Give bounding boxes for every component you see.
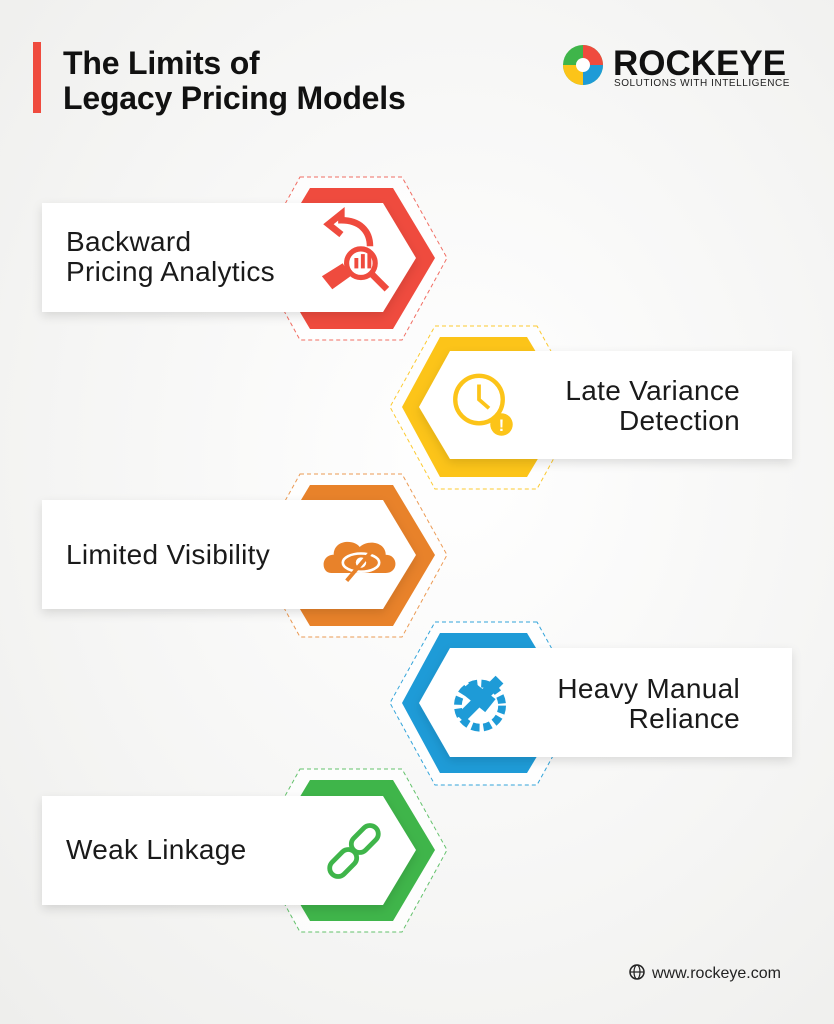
icon: clock alert [455, 376, 513, 436]
item 2: Late Variance Detection: Late Variance [565, 375, 740, 406]
icon: gear handshake [457, 676, 503, 728]
item 5: Weak Linkage [42, 769, 447, 932]
logo [563, 44, 790, 89]
item 2: Late Variance Detection: Detection [619, 405, 740, 436]
item 4: Heavy Manual Reliance [390, 622, 792, 785]
logo: ROCKEYE [613, 44, 786, 83]
title accent bar [33, 42, 41, 113]
footer: website: www.rockeye.com [651, 965, 781, 982]
item 3: Limited Visibility [42, 474, 447, 637]
item 3: Limited Visibility: Limited Visibility [66, 539, 270, 570]
item 1: Backward Pricing Analytics [42, 177, 447, 340]
item 4: Heavy Manual Reliance: Reliance [629, 703, 740, 734]
icon: clock alert: ! [499, 417, 504, 435]
title [63, 45, 406, 116]
logo: SOLUTIONS WITH INTELLIGENCE [614, 78, 790, 89]
item 4: Heavy Manual Reliance: Heavy Manual [557, 673, 740, 704]
item 1: Backward Pricing Analytics: Backward [66, 226, 191, 257]
title: The Limits of [63, 45, 260, 81]
icon: analytics tag [322, 214, 387, 289]
item 1: Backward Pricing Analytics: Pricing Analytics [66, 256, 275, 287]
icon: broken chain [326, 822, 382, 880]
icon: hidden eye [324, 542, 395, 581]
title: Legacy Pricing Models [63, 80, 406, 116]
item 2: Late Variance Detection [390, 326, 792, 489]
item 5: Weak Linkage: Weak Linkage [66, 834, 247, 865]
